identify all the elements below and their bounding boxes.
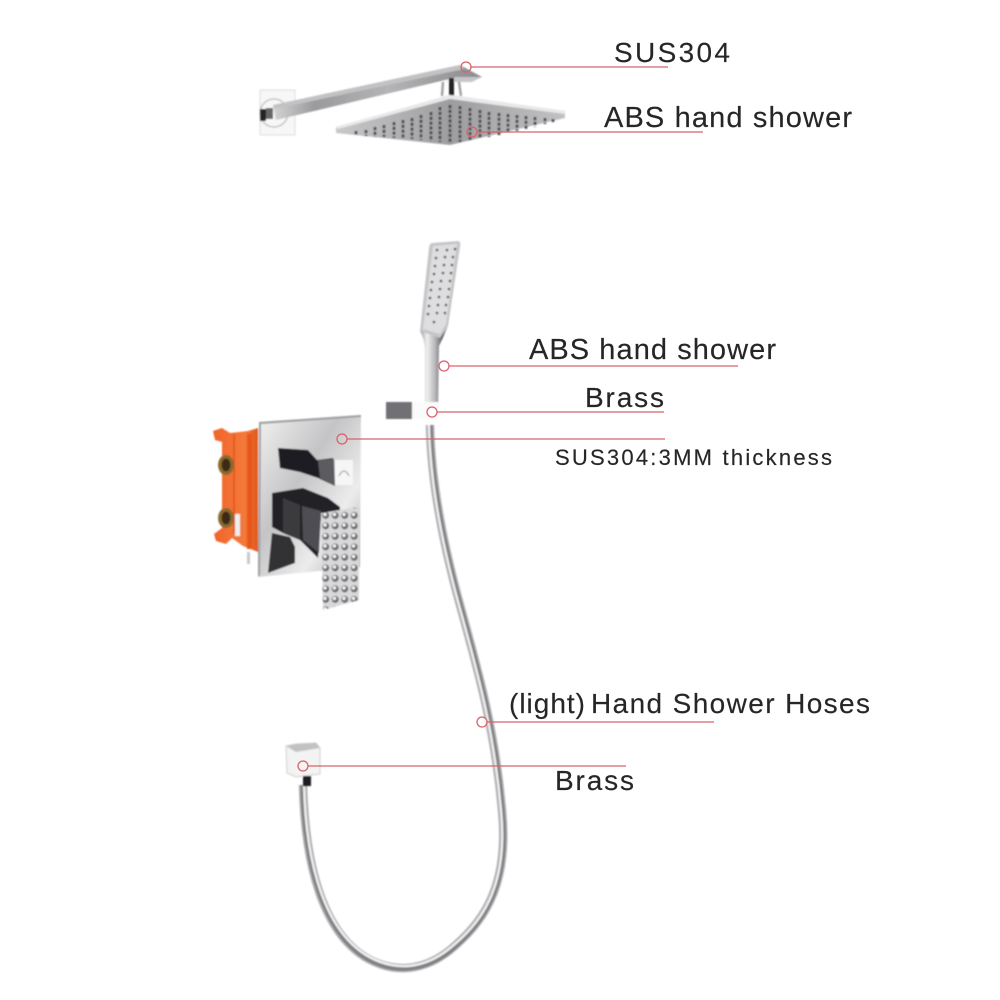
orange rough-in box (213, 428, 258, 552)
label: Brass (585, 382, 664, 413)
label: SUS304:3MM thickness (555, 445, 832, 470)
icon: flexible hose (302, 425, 504, 969)
label: ABS hand shower (529, 334, 776, 366)
callout: brass outlet (298, 761, 634, 796)
label: Brass (555, 765, 634, 796)
diverter (278, 448, 335, 486)
dimpled lever (321, 507, 359, 610)
callout: ABS overhead shower (467, 102, 852, 137)
diverter cube (335, 460, 353, 485)
handle reflection (268, 533, 295, 573)
nozzle dots (427, 248, 456, 323)
label: hoses: Hand Shower Hoses (591, 688, 870, 719)
icon: hand shower (386, 241, 460, 419)
label: light: (light) (509, 688, 585, 719)
icon: wall outlet elbow (286, 743, 320, 786)
icon: overhead rain shower with wall arm (260, 65, 565, 145)
callout: light hose (477, 688, 870, 727)
callout: ABS hand shower (439, 334, 776, 371)
head connector (449, 78, 454, 98)
handle body (272, 488, 340, 558)
head (336, 95, 565, 145)
wall plate (260, 90, 295, 135)
arm (273, 65, 482, 120)
callout: SUS304 arm (461, 37, 730, 72)
holder (386, 402, 412, 419)
label: SUS304 (614, 37, 730, 68)
icon: mixer valve (213, 415, 361, 610)
label: ABS hand shower (604, 102, 852, 134)
nozzles (356, 105, 553, 143)
callout: SUS304 plate (337, 434, 832, 470)
callout: brass holder (427, 382, 664, 417)
cover plate (258, 415, 361, 577)
